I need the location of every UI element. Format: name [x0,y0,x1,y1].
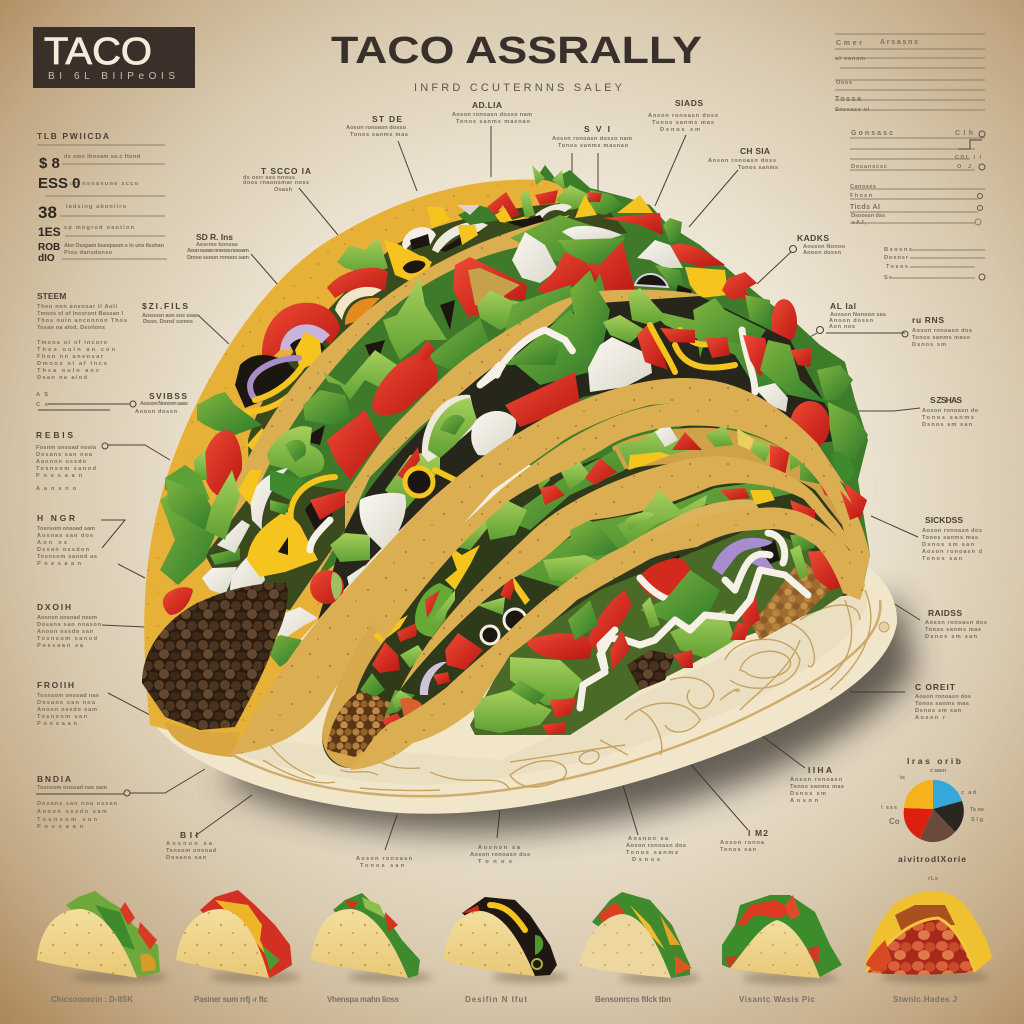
taco example: mixed taco [579,892,700,984]
panel: top right table 1: Cmer [836,40,862,47]
callout: froih: FROIIH [37,680,74,690]
pie chart: c ad [961,790,977,796]
panel: left stats list: sp mogrod oaution [64,225,135,231]
callout: kadks: KADKS [797,233,829,243]
taco example: lettuce taco [37,891,168,983]
panel: top right table 3: Dsoossn dss [851,213,885,219]
callout: al ial: AL Ial [830,301,856,311]
taco example: green taco [311,893,432,983]
callout: i m2: I M2 [748,828,768,838]
callout: bottom 1: Tonos san [360,863,405,869]
callout: bii: BII [180,830,198,840]
taco captions: Stwnlc.Hades J [893,995,957,1004]
callout: m rns: Dsnos sm [912,342,946,348]
callout: s zshas: Tonos sanms [922,415,974,421]
taco example: bean and cheese taco [865,876,992,983]
callout: kadks: Aosson Nonoo [803,244,846,250]
pie chart: Ts ne [970,807,984,813]
panel: top right table 4: Tosos [886,264,908,270]
callout: c oreit: C OREIT [915,682,956,692]
panel: left stats list: TLB PWIICDA [37,131,109,141]
callout: top ad lia: Aoson ronoasn dosso nam [452,112,532,118]
taco shell strip [563,500,760,595]
panel: left stats list: ds eme Ihoeam sa.c Hond [64,154,141,160]
plate [153,567,897,814]
taco shell 5 rim [372,402,870,640]
logo badge: BI 6L BIIPeOIS [48,71,175,82]
callout: bottom 2: Tonos [478,859,512,865]
taco shell 6 [400,456,852,690]
callout: top ch sia: CH SIA [740,146,770,156]
callout: al ial: Aon nos [829,324,855,330]
panel: top right table 2: CIh [955,130,973,137]
callout: rebis: Poesaan [36,473,83,479]
panel: top right table 3: Ticds AI [850,204,880,211]
callout: svibss: Anoon dossn [135,409,178,415]
callout: al ial: Aosson Nonoon sas [830,312,886,318]
callout: bottom 2: Aoson ronoasn dos [470,852,530,858]
panel: left stats list: Ptos dansdanso [64,250,113,256]
filling: third layer [318,270,868,620]
taco shell 5 base [322,622,385,768]
panel: left stats list [37,131,167,264]
callout: svibss: Aosson Nonoon sass [140,401,188,407]
taco captions: Pasiner sum rrfj -r ftc [194,995,269,1004]
panel: left stats list: ROB [38,242,60,253]
callout: dxoih: DXOIH [37,602,71,612]
taco captions: Desifin N Ifut [465,995,527,1004]
callout: h ngr: Desan ossdon [37,547,90,553]
pie chart: c sasn [930,768,947,774]
callout: h ngr: Aosnas san dos [37,533,93,539]
callout: froih: Tosnsom onsoad nas [37,693,99,699]
callout: h ngr: H NGR [37,513,75,523]
panel: steem text block: Tmoos ol of Incoront Bassan I [37,311,123,317]
pie chart: Co [889,817,900,826]
taco green silhouette [400,165,870,592]
callout: top ad lia [452,100,532,177]
lettuce behind second row [505,450,625,530]
callout: tsco ia [243,166,338,235]
taco example: cheese taco [176,890,300,983]
callout: h ngr: Poesaan [37,561,82,567]
panel: steem text block: Dmoos ol af Inco [37,361,108,367]
callout: s zshas: Dsnos sm san [922,422,973,428]
callout: bndia: BNDIA [37,774,71,784]
callout: top siads: Dsnos sm [660,127,700,133]
taco example: black bean taco [443,897,568,983]
callout: c oreit: Tonos sanms mas [915,701,969,707]
callout: tsco ia: T SCCO IA [261,166,311,176]
inner shell behind vegetable row [612,428,842,525]
callout: top st de: Tonos sanms mas [350,132,408,138]
callout: bottom 2: Aosnon sa [478,845,521,851]
panel: left stats list: ESS 0 [38,175,81,192]
panel: top right table 2: Gonsasc [851,130,893,137]
callout: dxoih: Anoon ossdo san [37,629,94,635]
pie chart: ts [900,775,905,781]
panel: top right table 3: sAJ, [852,220,866,226]
taco example: bean and cheese taco: rLs [928,876,938,882]
callout: dxoih: Poesaan sa [37,643,84,649]
callout: bii [166,795,252,861]
callout: m rns: Tonos sanms maso [912,335,971,341]
callout: rebis: Fosnm onsoad nosla [36,445,97,451]
panel: top right table 2: CDL I I [955,155,981,161]
filling: centre left [265,493,406,667]
callout: top sm: Tonos sanms masnao [558,143,629,149]
callout: top st de [346,114,417,191]
callout: c oreit: Dsnos sm san [915,708,962,714]
callout: sd r ins: Aesrmo bonsas [196,242,238,248]
panel: left stats list: un nsoasune scco [70,181,139,187]
panel: top right table 2: Dosanscsc [851,164,887,170]
callout: raidss: Dsnos sm san [925,634,978,640]
filling: vegetable row middle [543,488,862,583]
callout: sd r ins: SD R. Ins [196,232,233,242]
callout: s zshas: S ZSHAS [930,395,962,405]
pie chart: Iras orib [907,756,961,766]
callout: svibss: SVIBSS [149,391,187,401]
callout: m rns [902,315,972,348]
callout: bndia: Poesaan [37,824,84,830]
callout: ih 3r: Tonos sanms mas [790,784,844,790]
taco captions: Vhenspa mahn lioss [327,995,400,1004]
callout: raidss: Tonos sanms mas [925,627,981,633]
taco shell 3 [283,290,700,612]
callout: froih [37,680,150,727]
callout: top siads [648,98,718,206]
callout: top ch sia: Tonos sanms [738,165,778,171]
panel: top right table 4: Ss [884,275,892,281]
panel: steem text block: Then non anensar il Aoli [37,304,117,310]
callout: bndia: Dosans san noa ossan [37,801,118,807]
logo badge: TACO [44,31,152,73]
panel: top right table 4: Bsosns [884,247,912,253]
callout: rebis: Aannon ossdo [36,459,87,465]
panel: steem text block: Tmoos ot of Incoro [37,340,108,346]
callout: svibss: Ce [36,402,48,408]
filling: vegetable row top [533,423,867,520]
callout: top st de: ST DE [372,114,402,124]
callout: bottom 3 [622,782,686,863]
taco captions: Visantc Wasis Pic [739,995,816,1004]
panel: top right table 1: Snsoass ol [835,107,869,113]
taco captions: Bensonrcns ftlck tbn [595,995,671,1004]
callout: bottom 3: Aoson ronoasn dos [626,843,686,849]
callout: top ch sia: Aoson ronoasn doss [708,158,776,164]
callout: dxoih: Aosnsn onsoad nosm [37,615,97,621]
panel: top right table 4: Dosnsr [884,255,909,261]
right shell tip [800,492,855,555]
callout: svibss: AS [36,392,48,398]
callout: top sm: SVI [584,124,610,134]
callout: rebis: Aansno [36,486,77,492]
callout: h ngr: Tosnsom sanod as [37,554,97,560]
callout: sickdss [871,515,983,562]
callout: i m2 [687,760,768,853]
callout: al ial: Anoon dossn [829,318,874,324]
callout: froih: Tosnsom san [37,714,88,720]
logo badge [33,27,195,88]
back taco shell [144,180,606,750]
panel: top right table 1: Osos [836,80,852,86]
filling: small meat and vegetables [327,497,530,757]
panel: left stats list: Iadsing abonilro [66,204,127,210]
panel: top right table 3: Fhosn [850,193,873,199]
panel: left stats list: dIO [38,253,55,264]
taco example: salad taco [722,895,842,984]
panel: left stats list: 38 [38,203,57,222]
callout: top sm [552,124,632,192]
callout: bottom 3: Aosnon sa [628,836,669,842]
pie chart [881,756,984,864]
callout: ih 3r: Dsnos sm [790,791,826,797]
callout: bottom 2 [470,810,530,865]
callout: svibss [36,391,188,415]
callout: s zshas [847,395,979,428]
callout: froih: Poesaan [37,721,78,727]
callout: tsco ia: ds oerr ses nnous [243,175,295,181]
callout: h ngr: Aon ns [37,540,67,546]
callout: al ial [799,301,905,343]
callout: c oreit: Aoson ronoasn dos [915,694,971,700]
callout: raidss: RAIDSS [928,608,962,618]
panel: left stats list: Aler Dsspam bsespasm s lo uns Ilsshan [64,243,165,249]
ground meat [142,583,288,730]
title: TACO ASSRALLY [331,30,702,72]
callout: c oreit [850,682,971,721]
callout: ih 3r: IIHA [808,765,832,775]
callout: m rns: Aoson ronoasn dos [912,328,972,334]
callout: top siads: SIADS [675,98,703,108]
callout: top ad lia: AD.LIA [472,100,502,110]
callout: froih: Anoon ossdo sam [37,707,97,713]
front tacos inner base [322,420,865,768]
callout: rebis: Tosnsom sanod [36,466,97,472]
callout: froih: Dosans san noa [37,700,96,706]
panel: top right table 1 [835,34,985,113]
pie chart: \ sss [881,805,897,811]
pie chart: Slg [971,817,984,823]
callout: szi fils: Ansossn aon sos ssas [142,313,198,319]
callout: bottom 1: Aoson ronoasn [356,856,413,862]
callout: szi fils: Dsoo. Donsl ssmes [143,319,193,325]
panel: top right table 2: OJ [957,164,971,170]
plate swirl lines [263,590,871,790]
callout: rebis: REBIS [36,430,73,440]
callout: bii: Aosnon sa [166,841,213,847]
panel: top right table 3 [850,184,985,226]
panel: steem text block: Fhon nn anensar [37,354,104,360]
callout: s zshas: Aoson ronoasn do [922,408,979,414]
taco shell 4 [230,378,845,755]
callout: ih 3r: Aoson ronoasn [790,777,843,783]
callout: top sm: Aoson ronoasn dosso nam [552,136,632,142]
callout: bii: Dosans san [166,855,207,861]
taco shell 7 [350,507,865,770]
panel: left stats list: 1ES [38,225,61,239]
callout: dxoih [37,602,145,649]
callout: sickdss: Tonos san [922,556,963,562]
panel: steem text block: Dsan na alod [37,375,88,381]
panel: steem text block: Thos ouln an con [37,347,116,353]
panel: steem text block: Tosan na alod. Dsoilons [37,325,105,331]
shell base under meat [165,722,240,757]
callout: m rns: ru RNS [912,315,944,325]
callout: h ngr: Tosnsom onsoad sam [37,526,95,532]
callout: tsco ia: Osash [274,187,293,193]
callout: c oreit: Aoson r [915,715,946,721]
panel: top right table 4 [884,247,985,281]
callout: kadks: Anoon dossn [803,250,842,256]
callout: h ngr [37,513,145,578]
subtitle: INFRD CCUTERNNS SALEY [414,82,623,94]
callout: sickdss: Dsnos sm san [922,542,975,548]
callout: sd r ins: Aoon ouean nneoss nossam [187,248,249,254]
callout: kadks [757,233,846,284]
callout: rebis [36,430,170,492]
callout: bndia: Tosnsom onsoad nas sam [37,785,107,791]
panel: top right table 3: Canoses [850,184,876,190]
callout: raidss [882,596,987,640]
callout: rebis: Dosans san noa [36,452,93,458]
callout: sd r ins: Dmoe ssnon ronoos sam [187,255,249,261]
filling: second layer [262,215,830,610]
taco captions [51,995,957,1004]
filling: back layer [165,165,700,560]
pie chart: aivitrodIXorie [898,854,966,864]
callout: sickdss: Aoson ronoasn dos [922,528,982,534]
callout: dxoih: Dosans san noason [37,622,102,628]
panel: steem text block [37,291,127,381]
callout: ih 3r: Aoson [790,798,819,804]
panel: top right table 1: Arsasns [880,39,918,46]
plate shadow [220,600,915,833]
panel: steem text block: Thos ouln anconnon Thos [37,318,127,324]
panel: top right table 2 [850,130,985,170]
callout: bottom 3: Tonos sanms [626,850,678,856]
callout: sickdss: Tonos sanms mas [922,535,978,541]
callout: top ch sia [689,146,778,227]
callout: bottom 3: Dsnos [632,857,660,863]
callout: sickdss: Aoson ronoasn d [922,549,983,555]
callout: ih 3r [758,733,844,804]
filling: front layer [470,525,850,735]
callout: top siads: Tonos sanms mas [652,120,714,126]
panel: steem text block: STEEM [37,291,66,301]
panel: top right table 1: Tossa [835,96,861,103]
callout: bii: Tsnsom onsoad [166,848,217,854]
callout: top st de: Aoson ronoasn dosso [346,125,407,131]
callout: sd r ins [187,232,278,285]
callout: raidss: Aoson ronoasn dos [925,620,987,626]
callout: bndia: Tosnsom san [37,817,98,823]
callout: top siads: Aoson ronoasn doss [648,113,718,119]
lettuce behind third row [520,482,800,590]
callout: tsco ia: doos rnaonsmar noss [243,180,309,186]
lower-left filling [160,468,345,615]
callout: i m2: Tonos san [720,847,757,853]
callout: sickdss: SICKDSS [925,515,963,525]
panel: left stats list: $ 8 [39,155,60,172]
callout: szi fils: $ZI.FILS [142,301,188,311]
callout: i m2: Aoson ronoa [720,840,765,846]
callout: dxoih: Tosnsom sanod [37,636,98,642]
callout: bndia [36,769,205,830]
panel: steem text block: Thsa ouln anc [37,368,99,374]
callout: top ad lia: Tonos sanms masnao [456,119,531,125]
callout: bndia: Anoon ossdo sam [37,809,107,815]
panel: top right table 1: ol ssnsm [835,56,865,62]
taco captions: Chicsooonrin : D-IISK [51,995,133,1004]
taco shell 2 [205,215,570,555]
callout: szi fils [142,301,229,344]
callout: bottom 1 [356,815,413,869]
